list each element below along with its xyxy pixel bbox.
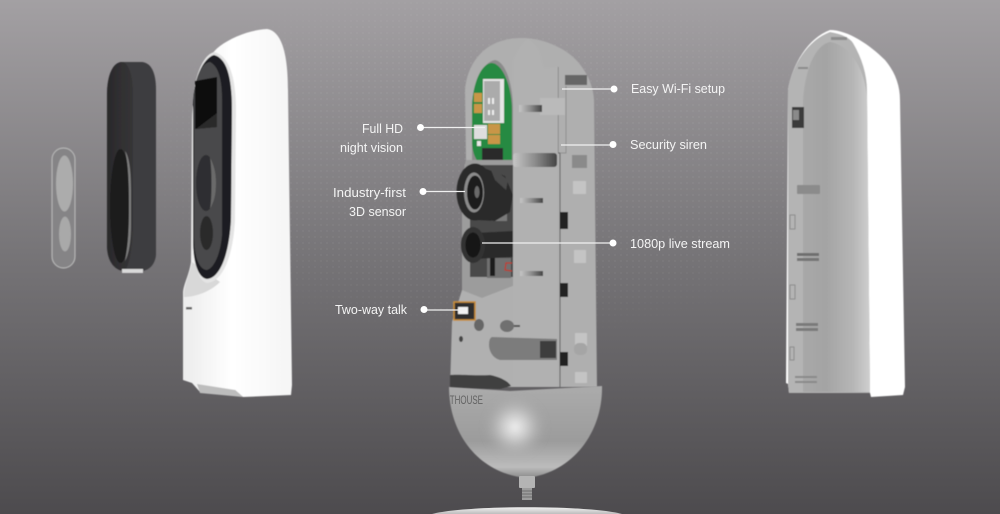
white front shell bbox=[183, 29, 292, 397]
callout: 1080p live stream: 1080p live stream bbox=[630, 236, 730, 251]
callout: industry-first 3d sensor: 3D sensor bbox=[349, 204, 407, 219]
speaker grille with orange frame bbox=[454, 302, 475, 320]
callout: easy wi-fi setup bbox=[562, 81, 725, 96]
callout: full hd night vision bbox=[340, 121, 485, 155]
right side part bbox=[558, 67, 560, 387]
red flex connector bbox=[505, 263, 512, 271]
callout: 1080p live stream bbox=[482, 236, 730, 251]
callout: full hd night vision: Full HD bbox=[362, 121, 403, 136]
callout: full hd night vision: night vision bbox=[340, 140, 403, 155]
front cover bbox=[466, 39, 558, 387]
dark ring gap bbox=[450, 375, 511, 389]
dot pattern bbox=[0, 0, 1000, 340]
callout: two-way talk: Two-way talk bbox=[335, 302, 407, 317]
lens plate bbox=[52, 148, 75, 268]
camera module bay bbox=[462, 160, 513, 298]
callout: security siren: Security siren bbox=[630, 137, 707, 152]
mounting screw bbox=[519, 476, 535, 500]
rear housing bbox=[450, 38, 597, 387]
brand text: HTHOUSE bbox=[444, 393, 483, 407]
callout: industry-first 3d sensor bbox=[333, 185, 465, 219]
cover slots bbox=[459, 98, 565, 360]
rear shell inner details bbox=[790, 37, 847, 383]
large lens bbox=[456, 164, 513, 221]
base stand bbox=[432, 507, 622, 514]
callout: two-way talk bbox=[335, 302, 465, 317]
callout: easy wi-fi setup: Easy Wi-Fi setup bbox=[631, 81, 725, 96]
front shell opening bbox=[193, 55, 232, 279]
callout: industry-first 3d sensor: Industry-first bbox=[333, 185, 406, 200]
dome base bbox=[444, 386, 602, 500]
central camera assembly bbox=[450, 38, 597, 389]
black bezel bbox=[107, 62, 156, 273]
callout: security siren bbox=[561, 137, 707, 152]
PCB recess bbox=[472, 60, 513, 172]
green circuit board bbox=[472, 63, 512, 164]
small lens bbox=[461, 227, 513, 263]
white rear shell bbox=[786, 30, 905, 397]
right side slots bbox=[560, 75, 587, 383]
